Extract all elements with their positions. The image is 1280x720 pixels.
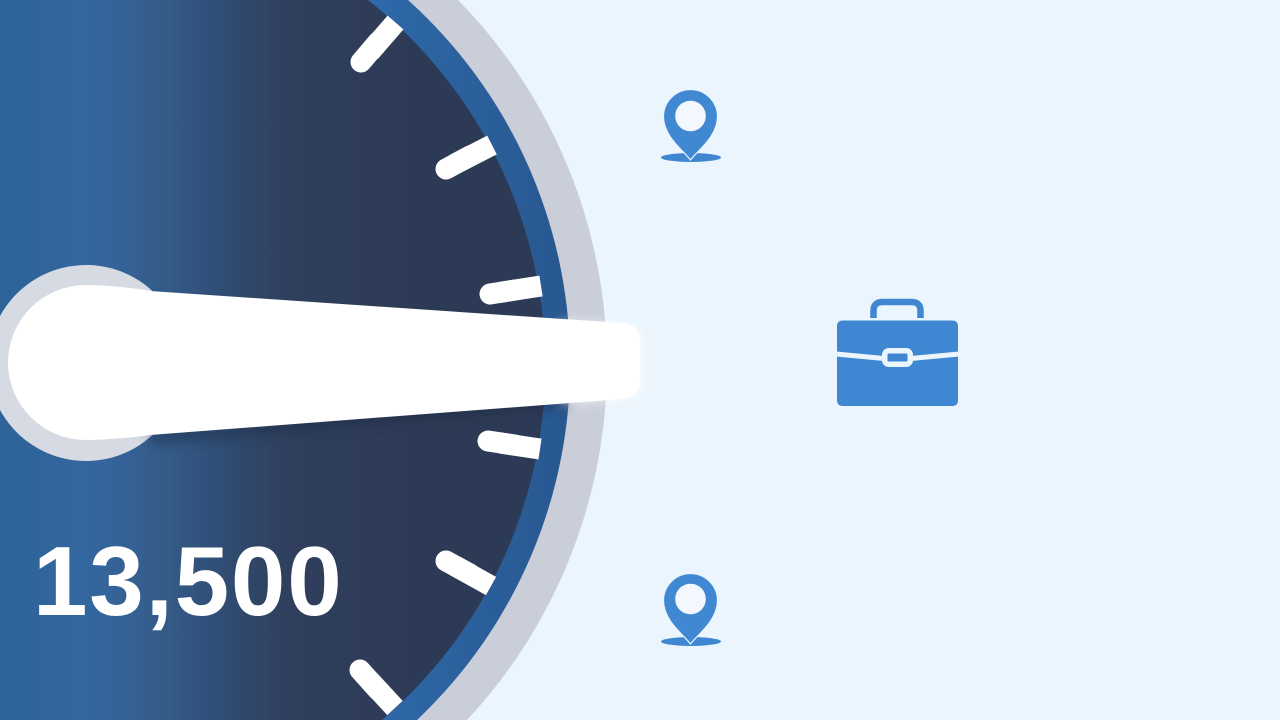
tick 1: [361, 22, 396, 62]
needle shadow: [150, 300, 570, 446]
briefcase clasp: [885, 351, 910, 364]
needle: [8, 285, 640, 440]
icon: location pin top: [661, 90, 721, 162]
pin ground shadow: [661, 153, 721, 162]
tick 5: [446, 561, 491, 586]
tick marks: [360, 22, 541, 708]
tick 4: [488, 441, 540, 449]
tick 2: [446, 145, 492, 169]
icon: location pin bottom: [661, 574, 721, 646]
gauge dial: [0, 0, 607, 720]
icon: briefcase: [836, 302, 959, 406]
tick 3: [490, 286, 541, 294]
pin body: [664, 90, 718, 160]
briefcase seam: [836, 354, 959, 358]
gauge outer grey rim: [0, 0, 607, 720]
pin ground shadow: [661, 637, 721, 646]
gauge face: [0, 0, 545, 720]
value label: 13,500: [33, 526, 344, 636]
pin body: [664, 574, 718, 644]
gauge blue ring: [0, 0, 570, 720]
pin hole: [675, 584, 706, 614]
briefcase body: [837, 320, 958, 406]
pin hole: [675, 101, 706, 131]
needle hub: [0, 265, 184, 461]
needle glow: [560, 322, 642, 403]
tick 6: [360, 670, 395, 708]
briefcase handle: [874, 302, 920, 318]
